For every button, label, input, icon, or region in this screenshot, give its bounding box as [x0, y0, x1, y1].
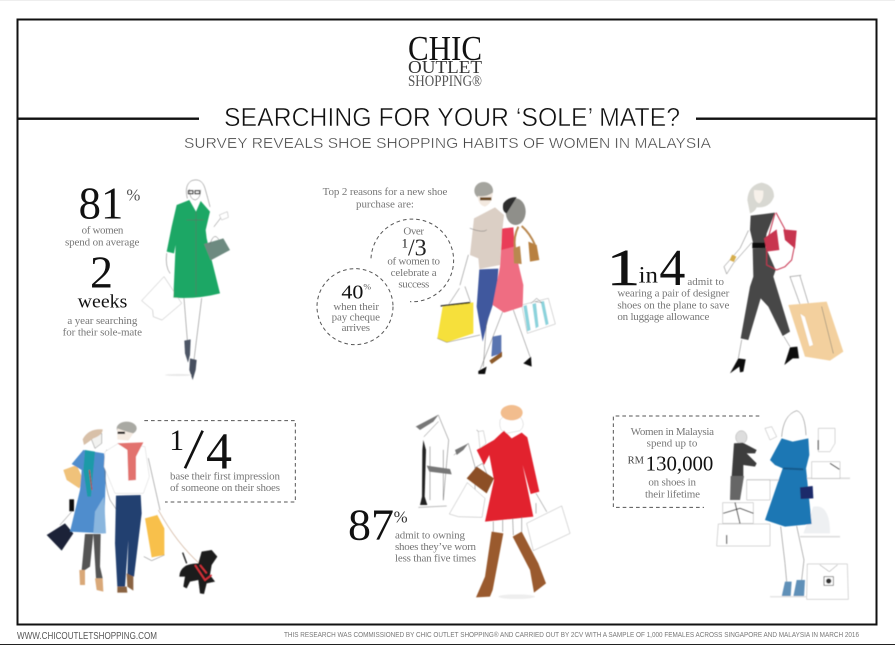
text: base their first impression: base their first impression — [170, 470, 280, 482]
callout: dashed frame — [613, 416, 759, 507]
callout: 40 percent: when their — [333, 301, 379, 313]
text: top 2 reasons: purchase are: — [356, 198, 414, 210]
statistic: 1 in 4: 4 — [659, 240, 685, 297]
statistic: 1/4: 4 — [206, 423, 232, 480]
callout: over one third — [371, 219, 454, 302]
text: on shoes in their lifetime: their lifetime — [645, 488, 700, 500]
text: admit to wearing designer shoes: on luggage allowance — [617, 311, 709, 323]
logo: CHIC — [408, 29, 482, 68]
callout: over one third: of women to — [387, 255, 440, 267]
subtitle: SURVEY REVEALS SHOE SHOPPING HABITS OF WOMEN IN MALAYSIA — [184, 135, 711, 152]
illustration: woman in blue coat shopping — [717, 411, 850, 599]
text: women in Malaysia spend up to — [631, 426, 714, 450]
title: SEARCHING FOR YOUR ‘SOLE’ MATE? — [224, 102, 680, 132]
text: of women spend on average — [65, 224, 139, 249]
callout: 40 percent — [317, 269, 393, 345]
text: women in Malaysia spend up to: spend up to — [647, 438, 698, 450]
logo: SHOPPING® — [408, 73, 482, 90]
text: a year searching — [63, 315, 142, 339]
text: admit to wearing designer shoes: wearing a pair of designer — [617, 288, 730, 300]
panel: top 2 reasons — [317, 182, 555, 374]
illustration: woman in green coat — [142, 180, 230, 380]
statistic: 81%: 81 — [79, 177, 123, 228]
text: women in Malaysia spend up to: Women in Malaysia — [631, 426, 714, 438]
text: of women spend on average: spend on average — [65, 237, 139, 249]
logo: OUTLET — [408, 57, 482, 77]
callout: 40 percent: 40 — [341, 282, 363, 304]
text: admit to wearing designer shoes: admit to — [687, 276, 724, 288]
illustration: couple walking a dog — [47, 422, 217, 594]
callout: dashed frame — [144, 421, 295, 502]
illustration: woman in red coat with street — [416, 405, 570, 599]
footer: website: WWW.CHICOUTLETSHOPPING.COM — [17, 631, 157, 642]
statistic: RM 130,000: RM — [628, 455, 644, 466]
text: admit to owning shoes — [395, 529, 476, 565]
text: top 2 reasons: Top 2 reasons for a new shoe — [323, 186, 447, 198]
callout: over one third: /3 — [408, 236, 427, 262]
logo — [408, 29, 482, 90]
text: top 2 reasons — [323, 186, 447, 210]
text: of women spend on average: of women — [82, 224, 124, 236]
illustration: couple with shopping bags — [437, 182, 555, 374]
statistic: 81%: % — [126, 186, 140, 205]
statistic: 2 weeks: weeks — [78, 291, 127, 312]
text: admit to owning shoes: less than five times — [395, 553, 476, 565]
text: admit to wearing designer shoes: shoes on the plane to save — [617, 300, 729, 312]
statistic: 2 weeks: 2 — [90, 246, 113, 297]
text: a year searching: a year searching — [67, 315, 138, 327]
illustration: woman with suitcase — [724, 183, 843, 373]
panel: 81 percent two weeks — [63, 177, 230, 380]
statistic: 1 in 4 — [607, 240, 685, 297]
callout: over one third: celebrate a — [391, 267, 437, 279]
text: base their first impression: of someone on their shoes — [170, 482, 280, 494]
statistic: 87%: % — [394, 507, 408, 526]
panel: one quarter first impression — [47, 421, 295, 594]
panel: RM 130,000 — [613, 411, 850, 599]
statistic: 2 weeks — [78, 246, 127, 312]
callout: over one third: success — [398, 278, 429, 290]
text: base their first impression — [170, 470, 280, 494]
panel: 87 percent — [348, 405, 570, 599]
callout: 40 percent: arrives — [342, 322, 370, 334]
callout: 40 percent: pay cheque — [332, 312, 380, 324]
text: on shoes in their lifetime: on shoes in — [648, 477, 696, 489]
statistic: 1 in 4: in — [639, 263, 658, 289]
panel: 1 in 4 — [607, 183, 843, 373]
text: a year searching: for their sole-mate — [63, 327, 142, 339]
statistic: 1/4: 1 — [169, 425, 184, 457]
statistic: 1/4 — [169, 423, 232, 480]
statistic: 87%: 87 — [348, 499, 394, 549]
statistic: RM 130,000: 130,000 — [646, 454, 713, 476]
text: admit to owning shoes: shoes they’ve worn — [395, 541, 476, 553]
callout: 40 percent: % — [363, 282, 371, 291]
title rules — [17, 118, 877, 120]
callout: over one third: Over — [403, 225, 424, 237]
text: on shoes in their lifetime — [645, 477, 700, 500]
text: admit to owning shoes: admit to owning — [395, 529, 465, 541]
callout: over one third: 1 — [402, 236, 408, 250]
text: admit to wearing designer shoes — [617, 276, 730, 323]
statistic: 1 in 4: 1 — [607, 240, 640, 297]
